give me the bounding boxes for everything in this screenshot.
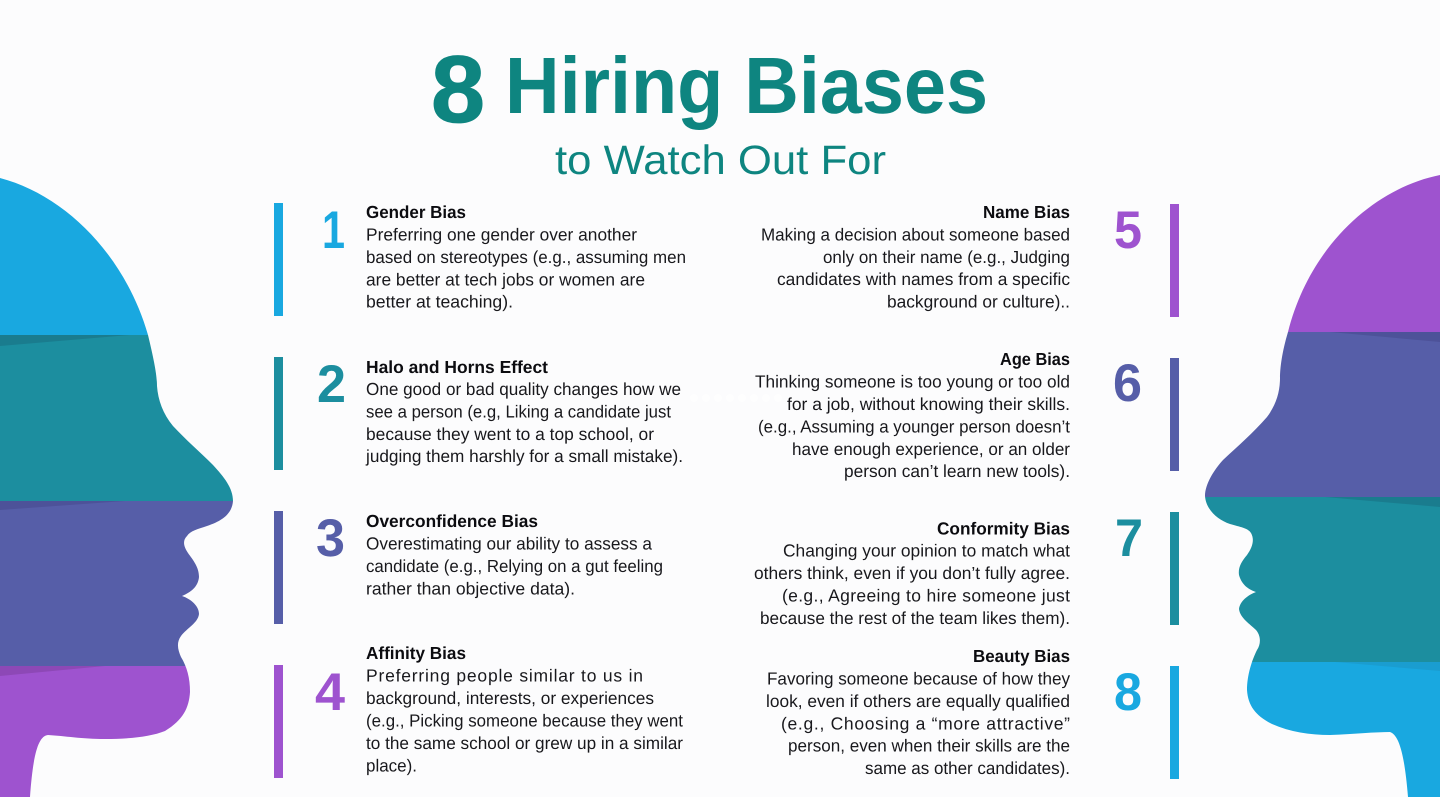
- item 2: halo and horns effect: judging them harshly for a small mistake).: [365, 446, 683, 466]
- item 1: gender bias: better at teaching).: [366, 292, 513, 312]
- subtitle: to Watch Out For: [555, 137, 886, 183]
- title: 8: [431, 37, 485, 143]
- item 7: conformity bias: 7: [1115, 509, 1143, 568]
- item 6: age bias: for a job, without knowing their skills.: [787, 394, 1070, 414]
- item 3: overconfidence bias: Overconfidence Bias: [366, 511, 538, 531]
- item 5: name bias: candidates with names from a specific: [777, 269, 1070, 289]
- item 3: overconfidence bias: 3: [316, 509, 345, 568]
- item 3: overconfidence bias: rather than objective data).: [366, 578, 575, 598]
- item 2: halo and horns effect: see a person (e.g, Liking a candidate just: [366, 402, 671, 422]
- item 8: beauty bias: look, even if others are equally qualified: [766, 691, 1070, 711]
- item 1: gender bias: 1: [322, 201, 345, 260]
- faint dots: [690, 394, 782, 402]
- item 6: age bias: [755, 349, 1179, 481]
- item 1: gender bias: based on stereotypes (e.g., assuming men: [366, 247, 686, 267]
- title: [431, 37, 988, 143]
- title: Hiring Biases: [505, 41, 988, 130]
- item 2: halo and horns effect: [274, 355, 683, 470]
- item 4: affinity bias: 4: [315, 663, 346, 722]
- right head silhouette: [1200, 170, 1440, 797]
- item 4: affinity bias: Preferring people similar to us in: [366, 666, 643, 686]
- item 4: affinity bias: to the same school or grew up in a similar: [366, 733, 683, 753]
- item 6: age bias: (e.g., Assuming a younger person doesn’t: [758, 416, 1070, 436]
- item 7: conformity bias: (e.g., Agreeing to hire someone just: [782, 586, 1070, 606]
- item 4: affinity bias: [274, 643, 683, 778]
- item 2: halo and horns effect: 2: [317, 355, 346, 414]
- item 5: name bias: only on their name (e.g., Judging: [823, 247, 1070, 267]
- item 2: halo and horns effect: because they went to a top school, or: [366, 424, 654, 444]
- item 7: conformity bias: others think, even if you don’t fully agree.: [754, 563, 1070, 583]
- item 1: gender bias: [274, 201, 686, 316]
- item 8: beauty bias: (e.g., Choosing a “more attractive”: [781, 714, 1070, 734]
- item 7: conformity bias: [754, 509, 1179, 628]
- item 5: name bias: Making a decision about someone based: [761, 224, 1070, 244]
- item 8: beauty bias: Favoring someone because of how they: [767, 668, 1070, 688]
- item 7: conformity bias: Changing your opinion to match what: [783, 540, 1070, 560]
- item 5: name bias: background or culture)..: [887, 292, 1070, 312]
- item 6: age bias: have enough experience, or an older: [792, 439, 1070, 459]
- item 4: affinity bias: place).: [366, 756, 417, 776]
- item 8: beauty bias: Beauty Bias: [973, 646, 1070, 666]
- item 8: beauty bias: person, even when their skills are the: [788, 736, 1070, 756]
- item 5: name bias: 5: [1114, 201, 1142, 260]
- item 4: affinity bias: background, interests, or experiences: [366, 688, 654, 708]
- item 6: age bias: Age Bias: [1000, 349, 1070, 369]
- item 8: beauty bias: same as other candidates).: [865, 758, 1070, 778]
- item 7: conformity bias: Conformity Bias: [937, 518, 1070, 538]
- item 6: age bias: 6: [1113, 354, 1142, 413]
- item 3: overconfidence bias: candidate (e.g., Relying on a gut feeling: [366, 556, 663, 576]
- item 2: halo and horns effect: One good or bad quality changes how we: [366, 379, 681, 399]
- item 8: beauty bias: [766, 646, 1179, 779]
- item 6: age bias: Thinking someone is too young or too old: [755, 372, 1070, 392]
- item 7: conformity bias: because the rest of the team likes them).: [760, 608, 1070, 628]
- item 1: gender bias: Preferring one gender over another: [366, 224, 637, 244]
- item 4: affinity bias: (e.g., Picking someone because they went: [366, 710, 683, 730]
- item 3: overconfidence bias: Overestimating our ability to assess a: [366, 534, 652, 554]
- item 5: name bias: Name Bias: [983, 202, 1070, 222]
- item 6: age bias: person can’t learn new tools).: [844, 461, 1070, 481]
- item 8: beauty bias: 8: [1114, 663, 1142, 722]
- item 4: affinity bias: Affinity Bias: [366, 643, 466, 663]
- item 1: gender bias: Gender Bias: [366, 202, 466, 222]
- item 3: overconfidence bias: [274, 509, 663, 624]
- item 2: halo and horns effect: Halo and Horns Effect: [366, 357, 548, 377]
- item 1: gender bias: are better at tech jobs or women are: [366, 270, 645, 290]
- item 5: name bias: [761, 201, 1179, 317]
- left head silhouette: [0, 170, 240, 797]
